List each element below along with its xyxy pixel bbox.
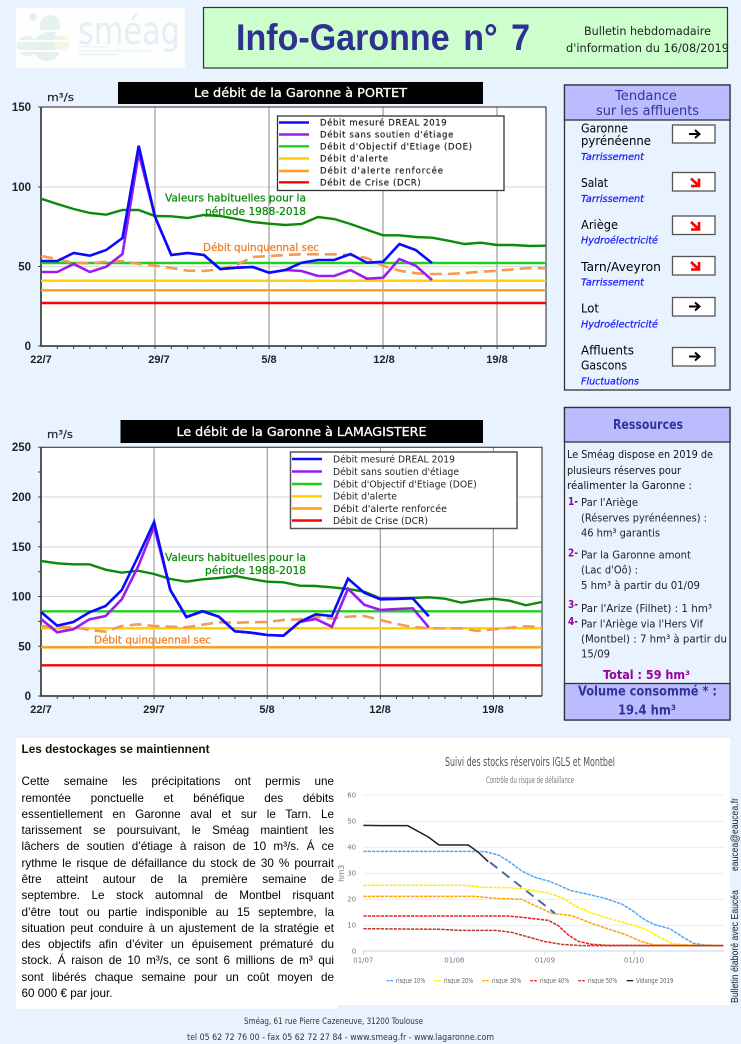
x axis labels: 19/8 (482, 704, 504, 716)
legend: Débit d'alerte renforcée (320, 166, 443, 176)
reserve 2: (Lac d'Oô) : (581, 564, 638, 576)
y axis labels: 150 (12, 542, 31, 554)
bulletin subtitle (566, 24, 729, 55)
intro text (567, 448, 713, 492)
x axis labels: 01/07 (353, 957, 373, 965)
annotation: usual values: Valeurs habituelles pour la (165, 192, 306, 204)
y unit: m³/s (47, 428, 73, 441)
volume consumed: Volume consommé * : (578, 684, 717, 700)
x axis labels: 01/08 (444, 957, 464, 965)
reserve 3: Par l'Arize (Filhet) : 1 hm³ (581, 602, 712, 615)
commentary text block: des objectifs afin d’éviter un épuisement prématuré du (22, 938, 334, 951)
Salat (581, 172, 715, 205)
commentary text block: lâchers de soutien d’étiage à raison de 10 m³/s. Á ce (22, 840, 334, 853)
reserve 3: 3- (568, 598, 578, 611)
vertical credit: Bulletin élaboré avec Eaucéa (729, 890, 741, 1003)
y axis labels (347, 791, 356, 955)
vertical credit: eaucea@eaucea.fr (729, 798, 741, 871)
five-year dry flow dashed line (41, 616, 542, 632)
panel header: Tendance (614, 88, 677, 104)
commentary text block: d’être tout ou partie indisponible au 15 septembre, la (22, 906, 334, 919)
x axis labels (30, 354, 508, 366)
legend (278, 116, 504, 190)
Tarn/Aveyron: Tarrissement (581, 278, 645, 288)
Tarn/Aveyron (580, 256, 715, 288)
annotation: usual values: période 1988-2018 (205, 565, 306, 577)
reserve 1: Par l'Ariège (581, 496, 638, 509)
Ariège: Hydroélectricité (581, 234, 658, 246)
commentary text block (22, 775, 334, 1000)
five-year dry flow dashed line (41, 254, 546, 274)
x axis labels (353, 957, 644, 965)
bulletin subtitle: d'information du 16/08/2019 (566, 41, 729, 55)
chart: suivi des stocks réservoirs (337, 754, 724, 985)
threshold lines (41, 611, 542, 665)
reserve 1 (568, 495, 707, 540)
chart: débit de la Garonne à Lamagistère (12, 420, 542, 716)
commentary text block: stock. Á raison de 10 m³/s, ce sont 6 millions de m³ qui (22, 954, 334, 967)
x axis labels: 01/09 (535, 957, 555, 965)
chart heading: Le débit de la Garonne à LAMAGISTERE (176, 424, 427, 439)
chart: débit de la Garonne à Portet (12, 82, 546, 366)
measured flow line (41, 146, 432, 273)
chart legend: risque 40% (540, 976, 569, 985)
footer address: tel 05 62 72 76 00 - fax 05 62 72 27 84 - www.smeag.fr - www.lagaronne.com (187, 1033, 494, 1043)
Affluents Gascons: Affluents (581, 344, 634, 358)
title banner (204, 8, 729, 68)
risk 40% (363, 916, 723, 946)
title: 7 (511, 17, 530, 58)
chart title: Suivi des stocks réservoirs IGLS et Montbel (445, 754, 615, 769)
commentary text block: septembre. Le stock automnal de Montbel risquant (22, 889, 334, 902)
y unit: m³/s (47, 91, 74, 104)
y axis labels: 50 (18, 262, 31, 274)
reserve 1: (Réserves pyrénéennes) : (581, 512, 707, 524)
y axis labels: 100 (12, 182, 31, 194)
drawdown 2019 (363, 825, 488, 862)
reserve 4: (Montbel) : 7 hm³ à partir du (581, 632, 727, 646)
Affluents Gascons: Gascons (581, 358, 627, 372)
chart legend: risque 20% (444, 976, 473, 985)
Affluents Gascons: Fluctuations (581, 376, 639, 388)
x axis labels: 12/8 (373, 354, 395, 366)
logo: Sméag (16, 8, 185, 68)
flow without support line (41, 527, 429, 636)
y axis labels: 200 (12, 492, 31, 504)
x axis labels: 12/8 (369, 704, 391, 716)
legend: Débit mesuré DREAL 2019 (333, 454, 455, 466)
logo: Sméag: sméag (78, 9, 180, 53)
Garonne pyrénéenne (581, 122, 715, 163)
threshold lines (41, 263, 546, 303)
legend: Débit de Crise (DCR) (320, 178, 421, 188)
volume consumed: 19.4 hm³ (618, 704, 676, 718)
panel: commentary background (16, 738, 730, 1009)
title: Info-Garonne (236, 17, 450, 58)
reserve 2: 5 hm³ à partir du 01/09 (581, 579, 700, 592)
intro text: plusieurs réserves pour (567, 464, 681, 477)
y axis labels: 10 (347, 922, 356, 930)
panel: ressources (564, 408, 730, 720)
chart legend: risque 50% (588, 976, 617, 985)
commentary text block: essentiellement en Garonne aval et sur le Tarn. Le (22, 808, 334, 821)
y axis labels: 150 (12, 102, 31, 114)
reserve 2 (568, 546, 700, 592)
commentary text block: remontée ponctuelle et bénéfique des débits (22, 792, 334, 805)
heading: commentary: Les destockages se maintiennent (22, 742, 210, 756)
chart legend (387, 976, 674, 985)
legend: Débit d'alerte (333, 492, 397, 502)
x axis labels: 22/7 (30, 704, 52, 716)
panel header (564, 408, 730, 442)
annotation: usual values: Valeurs habituelles pour la (165, 552, 306, 564)
x axis labels: 29/7 (148, 354, 170, 366)
x axis labels: 22/7 (30, 354, 52, 366)
x axis labels (30, 704, 504, 716)
y axis labels (12, 102, 31, 353)
annotation: five-year dry flow: Débit quinquennal sec (203, 242, 319, 254)
Tarn/Aveyron: Tarn/Aveyron (580, 260, 661, 274)
intro text: réalimenter la Garonne : (567, 479, 692, 492)
Ariège: Ariège (581, 218, 618, 232)
chart heading (120, 420, 483, 443)
reserve 2: Par la Garonne amont (581, 548, 692, 562)
legend: Débit d'Objectif d'Etiage (DOE) (333, 480, 477, 490)
annotation: usual values: période 1988-2018 (205, 206, 306, 218)
chart heading (118, 82, 483, 104)
commentary text block: sont libérés chaque semaine pour un coût moyen de (22, 971, 334, 984)
panel: tendance sur les affluents (564, 85, 730, 390)
usual values line (41, 199, 546, 246)
reserve 4: 15/09 (581, 648, 610, 660)
y axis labels: 40 (347, 844, 356, 852)
Lot: Lot (581, 302, 599, 316)
y axis title: hm3 (337, 865, 346, 882)
risk 10% (363, 851, 723, 946)
Lot: Hydroélectricité (581, 318, 658, 330)
reserve 2: 2- (568, 546, 578, 560)
panel header: sur les affluents (596, 103, 699, 119)
y axis labels: 0 (25, 341, 31, 353)
title: n° (463, 17, 498, 58)
Garonne pyrénéenne: pyrénéenne (581, 134, 651, 148)
legend (290, 452, 517, 528)
panel header: Ressources (613, 417, 683, 433)
x axis labels: 5/8 (259, 704, 275, 716)
Garonne pyrénéenne: Garonne (581, 122, 628, 136)
commentary text block: situation peut conduire à un ajustement de la stratégie et (22, 922, 334, 935)
reserve 4 (568, 615, 727, 660)
reserve 1: 1- (568, 495, 578, 508)
y axis labels: 20 (347, 896, 356, 904)
Lot (581, 298, 715, 330)
panel header (564, 85, 730, 120)
legend: Débit sans soutien d'étiage (333, 467, 459, 478)
reserve 4: Par l'Ariège via l'Hers Vif (581, 618, 704, 630)
Garonne pyrénéenne: Tarrissement (581, 152, 645, 163)
volume consumed (564, 684, 730, 720)
legend: Débit d'Objectif d'Etiage (DOE) (320, 142, 472, 152)
risk 30% (363, 896, 723, 946)
reserve 1: 46 hm³ garantis (581, 526, 660, 540)
total: Total : 59 hm³ (603, 668, 690, 682)
chart legend: Vidange 2019 (636, 976, 674, 985)
commentary text block: Cette semaine les précipitations ont permis une (22, 775, 334, 788)
intro text: Le Sméag dispose en 2019 de (567, 448, 713, 461)
x axis labels: 01/10 (624, 957, 644, 965)
x axis labels: 19/8 (486, 354, 508, 366)
x axis labels: 29/7 (143, 704, 165, 716)
annotation: five-year dry flow: Débit quinquennal sec (94, 634, 211, 646)
measured flow line (41, 522, 429, 636)
y axis labels: 60 (347, 791, 356, 799)
y axis labels: 50 (347, 818, 356, 826)
footer address: Sméag, 61 rue Pierre Cazeneuve, 31200 Toulouse (244, 1016, 423, 1027)
legend: Débit d'alerte renforcée (333, 504, 447, 515)
reserve 4: 4- (568, 615, 578, 628)
bulletin subtitle: Bulletin hebdomadaire (584, 24, 711, 38)
Affluents Gascons (581, 344, 715, 388)
flow without support line (41, 153, 432, 280)
chart legend: risque 10% (396, 976, 425, 985)
legend: Débit mesuré DREAL 2019 (320, 118, 447, 128)
legend: Débit d'alerte (320, 154, 388, 164)
chart subtitle: Contrôle du risque de défaillance (486, 775, 574, 786)
reserve 3 (568, 598, 712, 615)
commentary text block: tarissement se poursuivant, le Sméag maintient les (22, 824, 334, 837)
commentary text block: rythme le risque de défaillance du stock de 30 % pourrait (22, 857, 334, 870)
y axis labels: 0 (25, 691, 31, 703)
annotation: usual values (165, 192, 306, 218)
vertical credit (729, 798, 741, 1003)
x axis labels: 5/8 (261, 354, 277, 366)
y axis labels: 250 (12, 442, 31, 454)
y axis labels: 30 (347, 870, 356, 878)
y axis labels: 0 (352, 947, 356, 955)
annotation: usual values (165, 552, 306, 577)
legend: Débit de Crise (DCR) (333, 516, 428, 527)
usual values line (41, 561, 542, 605)
y axis labels: 100 (12, 592, 31, 604)
commentary text block: être atteint autour de la première semaine de (22, 873, 334, 886)
footer address (187, 1016, 494, 1043)
projected drawdown (490, 862, 555, 913)
chart legend: risque 30% (492, 976, 521, 985)
commentary text block: 60 000 € par jour. (22, 987, 112, 1000)
legend: Débit sans soutien d'étiage (320, 130, 453, 140)
risk 50% (363, 929, 723, 946)
risk 20% (363, 885, 723, 946)
y axis labels: 50 (18, 642, 31, 654)
y axis labels (12, 442, 31, 703)
Salat: Tarrissement (581, 194, 645, 205)
Ariège (581, 216, 715, 246)
Salat: Salat (581, 176, 608, 190)
chart heading: Le débit de la Garonne à PORTET (194, 85, 407, 100)
